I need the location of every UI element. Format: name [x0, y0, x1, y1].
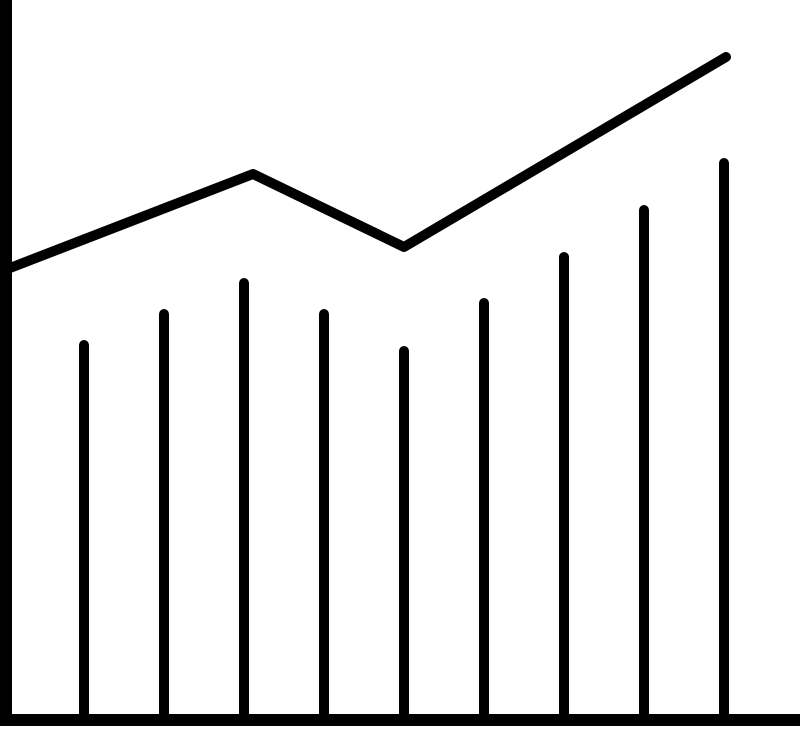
- trend line: [10, 57, 726, 268]
- bars: [84, 163, 724, 718]
- y axis: [0, 0, 12, 722]
- x axis: [0, 714, 800, 726]
